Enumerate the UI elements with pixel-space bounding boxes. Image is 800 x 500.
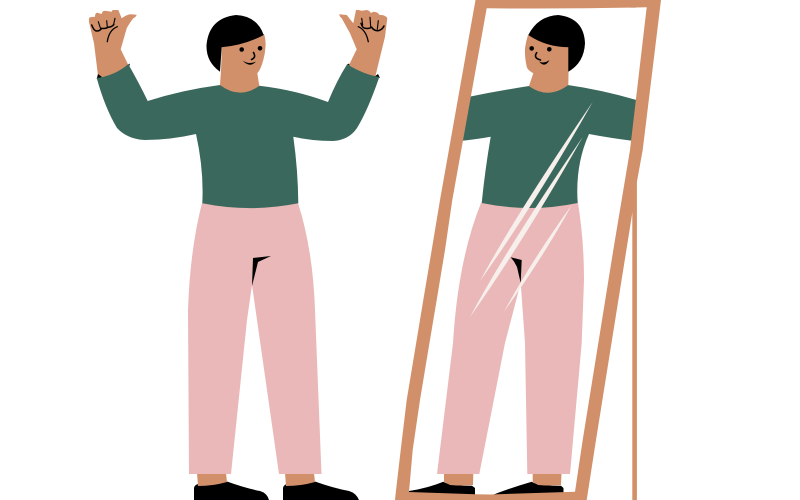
reflection nose <box>535 53 540 60</box>
left figure trouser crease <box>252 256 271 286</box>
reflection trouser crease <box>511 257 522 283</box>
reflection ankles <box>444 473 562 486</box>
mirror frame <box>395 0 661 500</box>
left figure eyes <box>239 46 262 52</box>
left figure trousers <box>188 203 322 474</box>
left figure neck and face <box>220 34 266 93</box>
left figure ankles <box>197 473 315 486</box>
reflection: figure inside mirror <box>409 15 640 496</box>
left figure hair <box>206 15 264 72</box>
left figure right hand <box>339 10 387 78</box>
left figure left hand <box>89 10 137 78</box>
left figure sweater <box>97 64 379 208</box>
reflection sweater <box>460 85 640 208</box>
left figure smile <box>242 60 256 65</box>
person: left figure <box>89 10 387 500</box>
mirror back leg <box>632 180 637 500</box>
left figure right hand finger lines <box>358 17 384 42</box>
reflection shoes <box>409 482 564 496</box>
reflection neck and face <box>525 35 569 93</box>
left figure cuffs <box>97 64 380 79</box>
mirror glass streaks <box>470 102 593 317</box>
reflection eyes <box>529 46 552 52</box>
reflection trousers <box>437 203 584 474</box>
left figure nose <box>252 52 255 60</box>
left figure shoes <box>194 482 359 500</box>
left figure left hand finger lines <box>92 18 117 42</box>
reflection smile <box>539 60 550 65</box>
reflection hair <box>528 15 585 72</box>
